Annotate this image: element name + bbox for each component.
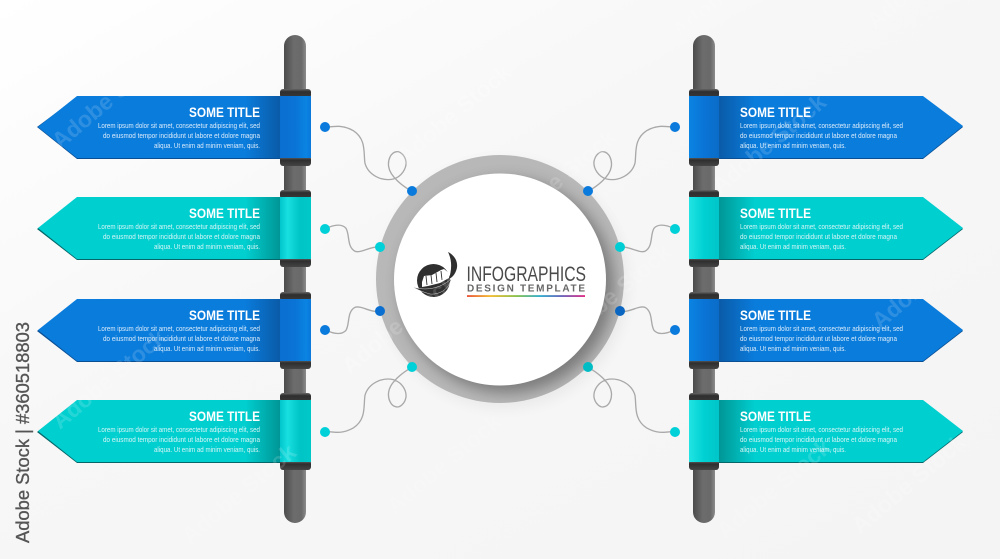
left panel 4: do eiusmod tempor incididunt ut labore et dolore magna xyxy=(103,435,261,444)
left panel 1: SOME TITLE xyxy=(189,104,260,120)
left panel 2 xyxy=(37,190,311,267)
left panel 1: Lorem ipsum dolor sit amet, consectetur adipiscing elit, sed xyxy=(98,121,260,130)
left panel 1 xyxy=(37,89,311,166)
right panel 1 xyxy=(689,89,963,166)
right panel 3: aliqua. Ut enim ad minim veniam, quis. xyxy=(740,344,846,353)
right pole xyxy=(693,35,715,523)
left panel 1: aliqua. Ut enim ad minim veniam, quis. xyxy=(154,141,260,150)
left pole xyxy=(284,35,306,523)
watermark: Adobe Stock xyxy=(47,323,171,434)
connector dots xyxy=(320,122,680,437)
right panel 3 xyxy=(689,292,963,369)
right panel 2 xyxy=(689,190,963,267)
right panel 2: Lorem ipsum dolor sit amet, consectetur adipiscing elit, sed xyxy=(740,222,903,231)
left panel 2: aliqua. Ut enim ad minim veniam, quis. xyxy=(154,242,260,251)
watermark: Adobe Stock xyxy=(392,58,516,169)
central circle xyxy=(376,155,628,408)
left panel 3: aliqua. Ut enim ad minim veniam, quis. xyxy=(154,344,260,353)
left panel 2: SOME TITLE xyxy=(189,205,260,221)
right panel 1: SOME TITLE xyxy=(740,104,811,120)
stock credit: Adobe Stock | #360518803 xyxy=(12,322,33,543)
watermark: Adobe Stock xyxy=(177,438,301,549)
right panel 3: Lorem ipsum dolor sit amet, consectetur adipiscing elit, sed xyxy=(740,324,903,333)
right panel 2: do eiusmod tempor incididunt ut labore et dolore magna xyxy=(740,232,898,241)
watermark: Adobe Stock xyxy=(712,433,836,544)
left panel 2: Lorem ipsum dolor sit amet, consectetur adipiscing elit, sed xyxy=(98,222,260,231)
left panel 3: do eiusmod tempor incididunt ut labore et dolore magna xyxy=(103,334,261,343)
right panel 4: Lorem ipsum dolor sit amet, consectetur adipiscing elit, sed xyxy=(740,425,903,434)
connector: left 4 xyxy=(325,367,412,432)
watermark: Adobe Stock xyxy=(707,88,831,199)
watermark: Adobe Stock xyxy=(847,428,971,539)
right panel 1: Lorem ipsum dolor sit amet, consectetur adipiscing elit, sed xyxy=(740,121,903,130)
right panel 2: aliqua. Ut enim ad minim veniam, quis. xyxy=(740,242,846,251)
left panel 4: SOME TITLE xyxy=(189,408,260,424)
left panel 3: SOME TITLE xyxy=(189,307,260,323)
left panel 4: aliqua. Ut enim ad minim veniam, quis. xyxy=(154,445,260,454)
watermark: Adobe Stock xyxy=(552,238,676,349)
connector: left 2 xyxy=(325,225,380,252)
connector: left 3 xyxy=(325,307,380,333)
watermark: Adobe Stock xyxy=(382,408,506,519)
right panel 4 xyxy=(689,393,963,470)
right panel 1: do eiusmod tempor incididunt ut labore et dolore magna xyxy=(740,131,898,140)
left panel 1: do eiusmod tempor incididunt ut labore et dolore magna xyxy=(103,131,261,140)
connector: right 1 xyxy=(588,126,675,191)
right panel 2: SOME TITLE xyxy=(740,205,811,221)
left panel 4: Lorem ipsum dolor sit amet, consectetur adipiscing elit, sed xyxy=(98,425,260,434)
watermark: Adobe Stock xyxy=(497,123,621,234)
logo title: INFOGRAPHICS xyxy=(466,262,586,286)
right panel 1: aliqua. Ut enim ad minim veniam, quis. xyxy=(740,141,846,150)
connector: right 3 xyxy=(620,307,675,333)
left panel 3: Lorem ipsum dolor sit amet, consectetur adipiscing elit, sed xyxy=(98,324,260,333)
right panel 4: aliqua. Ut enim ad minim veniam, quis. xyxy=(740,445,846,454)
logo icon xyxy=(413,252,457,297)
left panel 2: do eiusmod tempor incididunt ut labore et dolore magna xyxy=(103,232,261,241)
logo subtitle: DESIGN TEMPLATE xyxy=(467,284,585,294)
connector: right 2 xyxy=(620,225,675,252)
rainbow rule xyxy=(467,295,585,297)
watermark: Adobe Stock xyxy=(867,223,991,334)
right panel 4: SOME TITLE xyxy=(740,408,811,424)
left panel 4 xyxy=(37,393,311,470)
right panel 3: do eiusmod tempor incididunt ut labore et dolore magna xyxy=(740,334,898,343)
connector: left 1 xyxy=(325,126,412,191)
right panel 4: do eiusmod tempor incididunt ut labore et dolore magna xyxy=(740,435,898,444)
watermark: Adobe Stock xyxy=(337,268,461,379)
watermark: Adobe Stock xyxy=(47,43,171,154)
connector: right 4 xyxy=(588,367,675,432)
right panel 3: SOME TITLE xyxy=(740,307,811,323)
left panel 3 xyxy=(37,292,311,369)
